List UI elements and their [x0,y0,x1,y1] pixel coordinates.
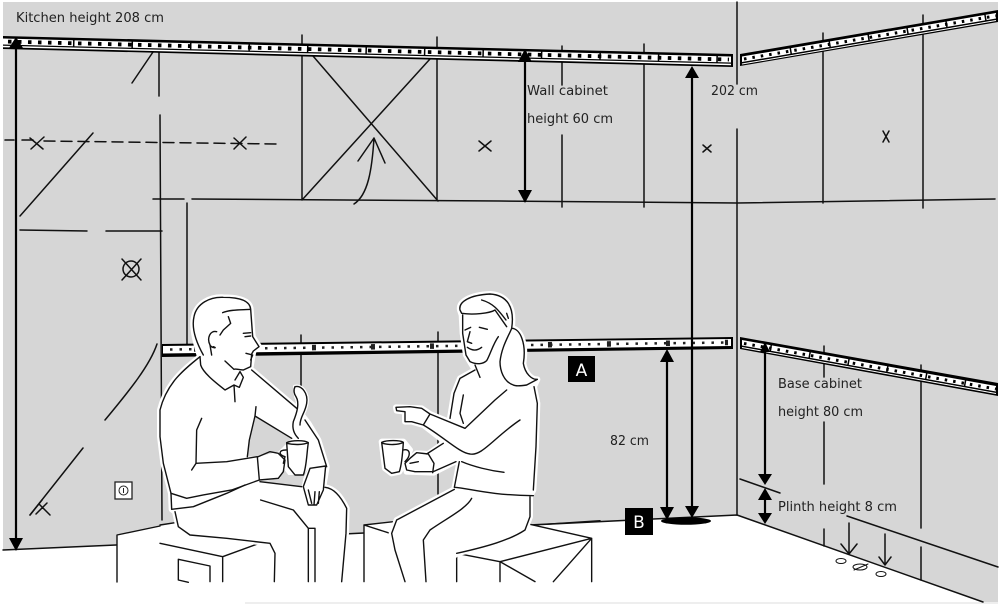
rail: top right wall [740,10,998,66]
label: base cabinet height: height 80 cm [778,405,863,420]
man head [193,297,259,370]
steam [293,386,307,438]
label: wall cabinet height: height 60 cm [527,112,613,127]
floor marker ellipse [661,517,711,525]
bottom edge strip [245,602,998,604]
label: wall cabinet height: Wall cabinet [527,84,608,99]
rail: base cabinet right wall [740,337,998,396]
marker A [568,356,595,382]
dimension arrow: plinth height [758,488,772,524]
man silhouette [160,297,347,582]
marker A: A [576,361,588,381]
label: base cabinet height [778,377,863,420]
woman face [463,315,498,364]
gap under mug [260,468,308,487]
label: 202 cm: 202 cm [711,84,758,99]
woman lower body [382,441,533,582]
rail: base cabinet back wall [162,337,733,357]
label: kitchen height: Kitchen height 208 cm [16,11,164,26]
dimension arrow: kitchen height [9,37,23,551]
man mug [280,441,308,475]
man collar [200,357,243,402]
woman silhouette body [392,294,537,582]
marker B [625,508,653,535]
man legs [175,482,347,582]
man hand on knee [303,466,326,505]
marker B: B [633,513,645,533]
woman [382,294,537,582]
label: wall cabinet height [527,84,613,127]
woman arm silhouette [396,390,520,457]
gap between arm and body [247,416,292,457]
dimension arrow: wall cabinet height [518,49,532,203]
label: plinth height: Plinth height 8 cm [778,500,897,515]
woman legs [392,462,533,582]
man shirt and arms [160,357,245,509]
rail: top left wall [3,36,733,67]
dimension arrow: 202 cm [685,66,699,518]
icon: ceiling light point [122,259,141,280]
floor arrows and floor points [836,523,891,576]
marks: crosses [30,131,889,515]
label: base cabinet height: Base cabinet [778,377,862,392]
woman torso and arm [450,365,537,490]
box under man [117,523,300,582]
icon: wall socket [115,482,132,499]
label: 82 cm: 82 cm [610,434,649,449]
man [160,297,347,582]
curved arrow: door swing [354,138,385,204]
woman mug silhouette [382,442,410,473]
box under woman [364,521,600,582]
woman lower arm silhouette [405,443,460,473]
dimension arrow: base cabinet height [758,342,772,485]
woman mug [382,441,409,473]
dimension arrow: 82 cm [660,349,674,520]
woman hair [460,294,537,386]
man hand on mug [258,452,285,480]
